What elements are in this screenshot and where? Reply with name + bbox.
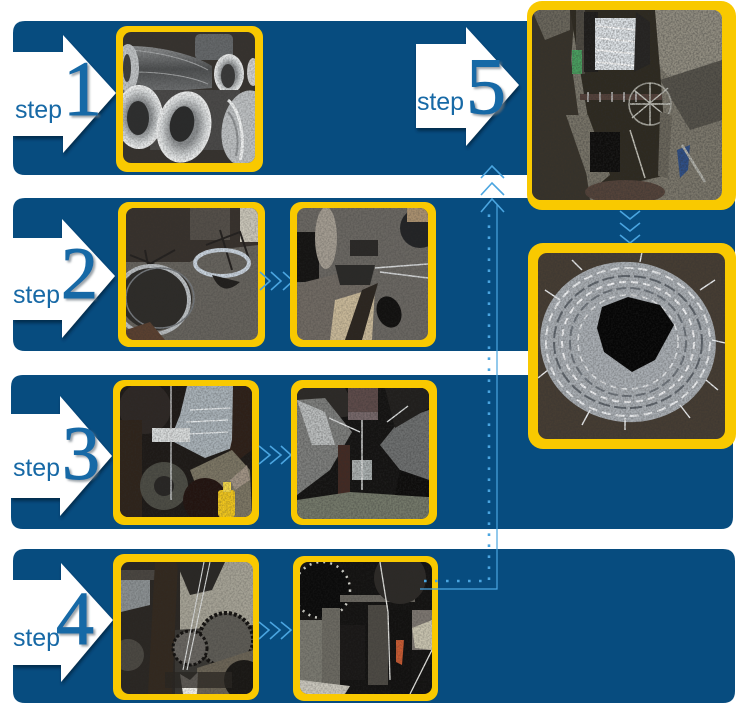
photo: gears and wire (112, 554, 264, 700)
label: step 1 (15, 45, 102, 132)
arrow: down chevrons (620, 211, 640, 243)
arrow: step 3 (11, 396, 112, 516)
label: step 3: 3 (62, 412, 100, 496)
panel: step 4 background (13, 549, 735, 703)
panel: step 1 background (13, 21, 560, 175)
label: step 4 (13, 577, 94, 661)
step 5 (416, 1, 736, 449)
step 3 (0, 375, 733, 529)
arrow: up chevrons (481, 166, 504, 212)
arrow: step 1 (13, 35, 116, 153)
label: step 3: step (13, 454, 60, 482)
label: step 5 (417, 43, 506, 131)
step 2 (0, 198, 735, 351)
label: step 5: step (417, 88, 464, 116)
photo: wheel and cutter (293, 552, 438, 701)
photo: wire on pay-off stand (115, 202, 265, 347)
label: step 2: step (13, 281, 60, 309)
panel: step 3 background (11, 375, 733, 529)
photo: barbed wire winding machine (527, 1, 736, 210)
photo: twisting wire with coil (113, 380, 259, 525)
arrow: chevrons step 2 (260, 272, 293, 290)
label: step 2 (13, 233, 98, 315)
connector: dotted and solid line from step 4 to step 5 (420, 205, 497, 589)
step 1 (0, 21, 560, 175)
label: step 3 (13, 412, 100, 496)
label: step 4: step (13, 624, 60, 652)
arrow: step 5 (416, 27, 519, 146)
photo: barb wrapping head (291, 380, 437, 525)
arrow: step 2 (13, 219, 115, 338)
arrow: step 4 (13, 563, 113, 682)
photo: finished barbed wire roll (528, 243, 736, 449)
label: step 2: 2 (61, 233, 98, 315)
arrow: chevrons step 4 (259, 622, 291, 639)
label: step 1: 1 (63, 45, 102, 132)
arrow: chevrons step 3 (259, 446, 291, 464)
photo: wire drawing machine (290, 202, 440, 347)
panel: step 2 background (13, 198, 735, 351)
label: step 1: step (15, 96, 62, 124)
photo: wire coils (115, 26, 276, 172)
label: step 5: 5 (466, 43, 506, 131)
label: step 4: 4 (56, 577, 94, 661)
step 4 (0, 549, 735, 704)
